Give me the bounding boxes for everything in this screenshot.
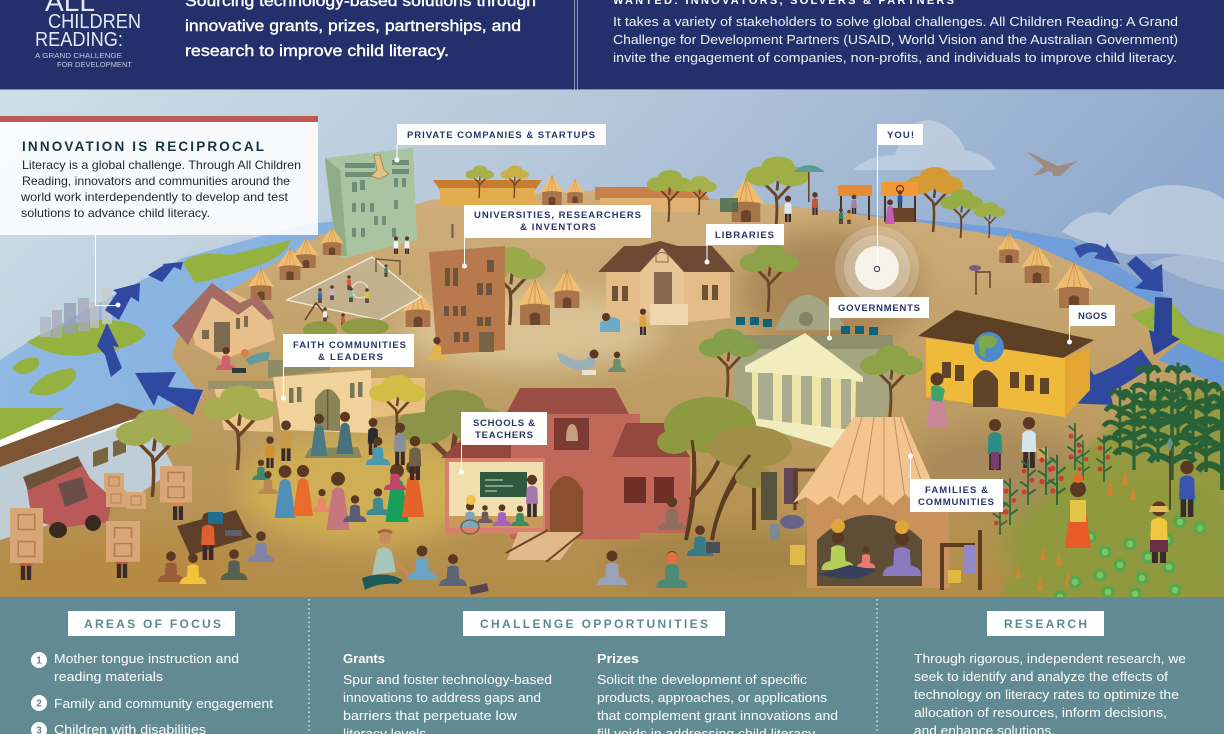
left house <box>172 283 275 360</box>
callout: innovation is reciprocal: Literacy is a global challenge. Through All Children <box>22 158 301 172</box>
arrow right 3 <box>1149 297 1180 355</box>
huts: left cluster <box>247 227 344 300</box>
red schoolhouse <box>441 388 690 562</box>
header statement <box>185 0 536 60</box>
tree group near government <box>699 329 923 417</box>
arrow right 4 <box>1078 349 1152 405</box>
tomato plants <box>993 423 1112 535</box>
label: universities <box>462 205 651 268</box>
warehouse and truck <box>0 403 193 540</box>
trees by school <box>657 397 815 540</box>
label: faith communities <box>281 334 414 400</box>
airplane <box>1026 151 1078 176</box>
callout: innovation is reciprocal: world work interdependently to develop and test <box>20 190 289 204</box>
government building <box>733 295 893 448</box>
glow: you <box>835 226 919 297</box>
readers by house <box>216 347 270 373</box>
logo wordmark <box>35 0 141 69</box>
land: far green strips and islands <box>0 240 1224 440</box>
huts: right cluster <box>969 233 1094 308</box>
arrow left 4 <box>148 262 183 282</box>
panel: areas of focus: 2 <box>36 698 42 710</box>
panel: research: technology on literacy rates to optimize the <box>914 687 1179 702</box>
leader line: innovation <box>96 235 120 308</box>
big tree left of school <box>397 390 511 520</box>
cornfield <box>1104 362 1224 490</box>
arrow right 1 <box>1074 243 1120 264</box>
panel: challenge opportunities: Prizes <box>597 651 639 666</box>
panel: challenge opportunities: barriers that perpetuate low <box>343 708 518 723</box>
header statement: innovative grants, prizes, partnerships, and <box>185 18 521 35</box>
blue cycle arrows <box>97 243 1180 415</box>
soccer field <box>287 257 421 328</box>
wanted text block <box>613 0 1178 65</box>
hilltop village <box>433 156 1005 238</box>
panel: research: Through rigorous, independent research, we <box>914 651 1186 666</box>
panel: challenge opportunities: Spur and foster technology-based <box>343 672 552 687</box>
label: faith communities: & LEADERS <box>318 352 383 363</box>
brown brick building: universities <box>429 224 505 355</box>
label: ngos: NGOS <box>1078 311 1107 322</box>
panel: challenge opportunities: Grants <box>343 651 385 666</box>
label: governments <box>827 297 929 340</box>
teacher with children <box>362 530 489 595</box>
logo wordmark: READING: <box>35 29 123 51</box>
panel: challenge opportunities: Solicit the development of specific <box>597 672 808 687</box>
arrow right 2 <box>1127 256 1163 292</box>
logo wordmark: FOR DEVELOPMENT <box>57 60 132 69</box>
illustrated world scene <box>0 90 1224 604</box>
label: universities: UNIVERSITIES, RESEARCHERS <box>474 210 641 221</box>
woman and handshake figures <box>926 372 1048 470</box>
panel: challenge opportunities: that complement grant innovations and <box>597 708 838 723</box>
wanted text block: It takes a variety of stakeholders to solve global challenges. All Children Reading: A Grand <box>613 15 1178 29</box>
label: schools: SCHOOLS & <box>473 418 535 429</box>
panel: research <box>914 611 1186 734</box>
label: governments: GOVERNMENTS <box>838 303 920 314</box>
arrow left 1 <box>135 372 203 415</box>
arrow left 2 <box>97 323 122 377</box>
scientists <box>394 236 410 254</box>
ground <box>0 190 1224 597</box>
tree by warehouse <box>116 409 193 497</box>
panel: areas of focus: reading materials <box>54 669 164 684</box>
panel: areas of focus: 1 <box>36 656 42 666</box>
label: schools: TEACHERS <box>475 430 533 441</box>
community gathering <box>252 412 424 530</box>
label: families: FAMILIES & <box>925 485 988 496</box>
panel: research: RESEARCH <box>1004 617 1087 631</box>
label: families <box>908 454 1003 512</box>
sky <box>0 90 1224 360</box>
label: families: COMMUNITIES <box>918 497 994 508</box>
callout: innovation is reciprocal: Reading, innovators and communities around the <box>22 174 290 188</box>
footer panel <box>0 597 1224 734</box>
panel: areas of focus: AREAS OF FOCUS <box>84 617 221 631</box>
bench reader and children <box>158 510 274 584</box>
ground shading <box>0 230 1224 600</box>
cabbages <box>1054 494 1206 604</box>
panel: challenge opportunities: CHALLENGE OPPORTUNITIES <box>480 617 708 631</box>
clouds <box>852 120 1224 290</box>
label: you <box>874 124 923 272</box>
label: faith communities: FAITH COMMUNITIES <box>293 340 406 351</box>
callout: innovation is reciprocal: INNOVATION IS RECIPROCAL <box>22 139 264 154</box>
library readers <box>557 309 647 375</box>
label: libraries <box>704 224 784 264</box>
tree by library <box>740 244 799 312</box>
farmers <box>1065 437 1195 563</box>
readers on ground <box>597 497 720 588</box>
faith building <box>208 360 425 433</box>
label: ngos <box>1067 305 1115 344</box>
label: schools <box>459 412 547 474</box>
green tower: private companies <box>325 148 417 258</box>
bushes <box>303 318 389 334</box>
panel: research: seek to identify and analyze the effects of <box>914 669 1168 684</box>
panel: areas of focus <box>31 611 273 734</box>
panel: challenge opportunities: products, approaches, or applications <box>597 690 828 705</box>
huts: centre cluster <box>402 247 583 327</box>
label: you: YOU! <box>887 130 914 141</box>
panel: research: allocation of resources, inform decisions, <box>914 705 1167 720</box>
family hut <box>793 417 950 588</box>
logo wordmark: A GRAND CHALLENGE <box>35 51 122 60</box>
logo wordmark: CHILDREN <box>48 11 141 33</box>
label: private companies <box>394 124 606 162</box>
ocean <box>0 190 1224 420</box>
panel: challenge opportunities: innovations to address gaps and <box>343 690 541 705</box>
people carrying boxes <box>10 466 192 580</box>
carrots <box>1015 471 1136 590</box>
label: universities: & INVENTORS <box>520 222 596 233</box>
callout: innovation is reciprocal: solutions to advance child literacy. <box>21 206 210 220</box>
wanted text block: invite the engagement of companies, non-profits, and individuals to improve child literacy. <box>613 51 1177 65</box>
reader by brown building <box>427 337 447 360</box>
arrow left 3 <box>105 283 140 320</box>
market stalls <box>720 165 918 224</box>
panel: areas of focus: Mother tongue instruction and <box>54 651 239 666</box>
classroom <box>459 475 538 534</box>
callout: innovation is reciprocal <box>0 116 318 235</box>
header statement: research to improve child literacy. <box>185 43 449 60</box>
label: private companies: PRIVATE COMPANIES & STARTUPS <box>407 130 595 141</box>
city skyline <box>40 288 112 338</box>
family in hut <box>770 519 980 590</box>
library <box>598 241 735 325</box>
NGO building <box>918 310 1094 417</box>
truck <box>23 456 112 538</box>
panel: challenge opportunities <box>343 611 838 734</box>
trees beside faith building <box>202 375 426 470</box>
wanted text block: Challenge for Development Partners (USAID, World Vision and the Australian Government) <box>613 33 1178 47</box>
label: libraries: LIBRARIES <box>715 230 774 241</box>
panel: areas of focus: Family and community engagement <box>54 696 273 711</box>
green farmland <box>1000 385 1224 597</box>
header band <box>0 0 1224 90</box>
